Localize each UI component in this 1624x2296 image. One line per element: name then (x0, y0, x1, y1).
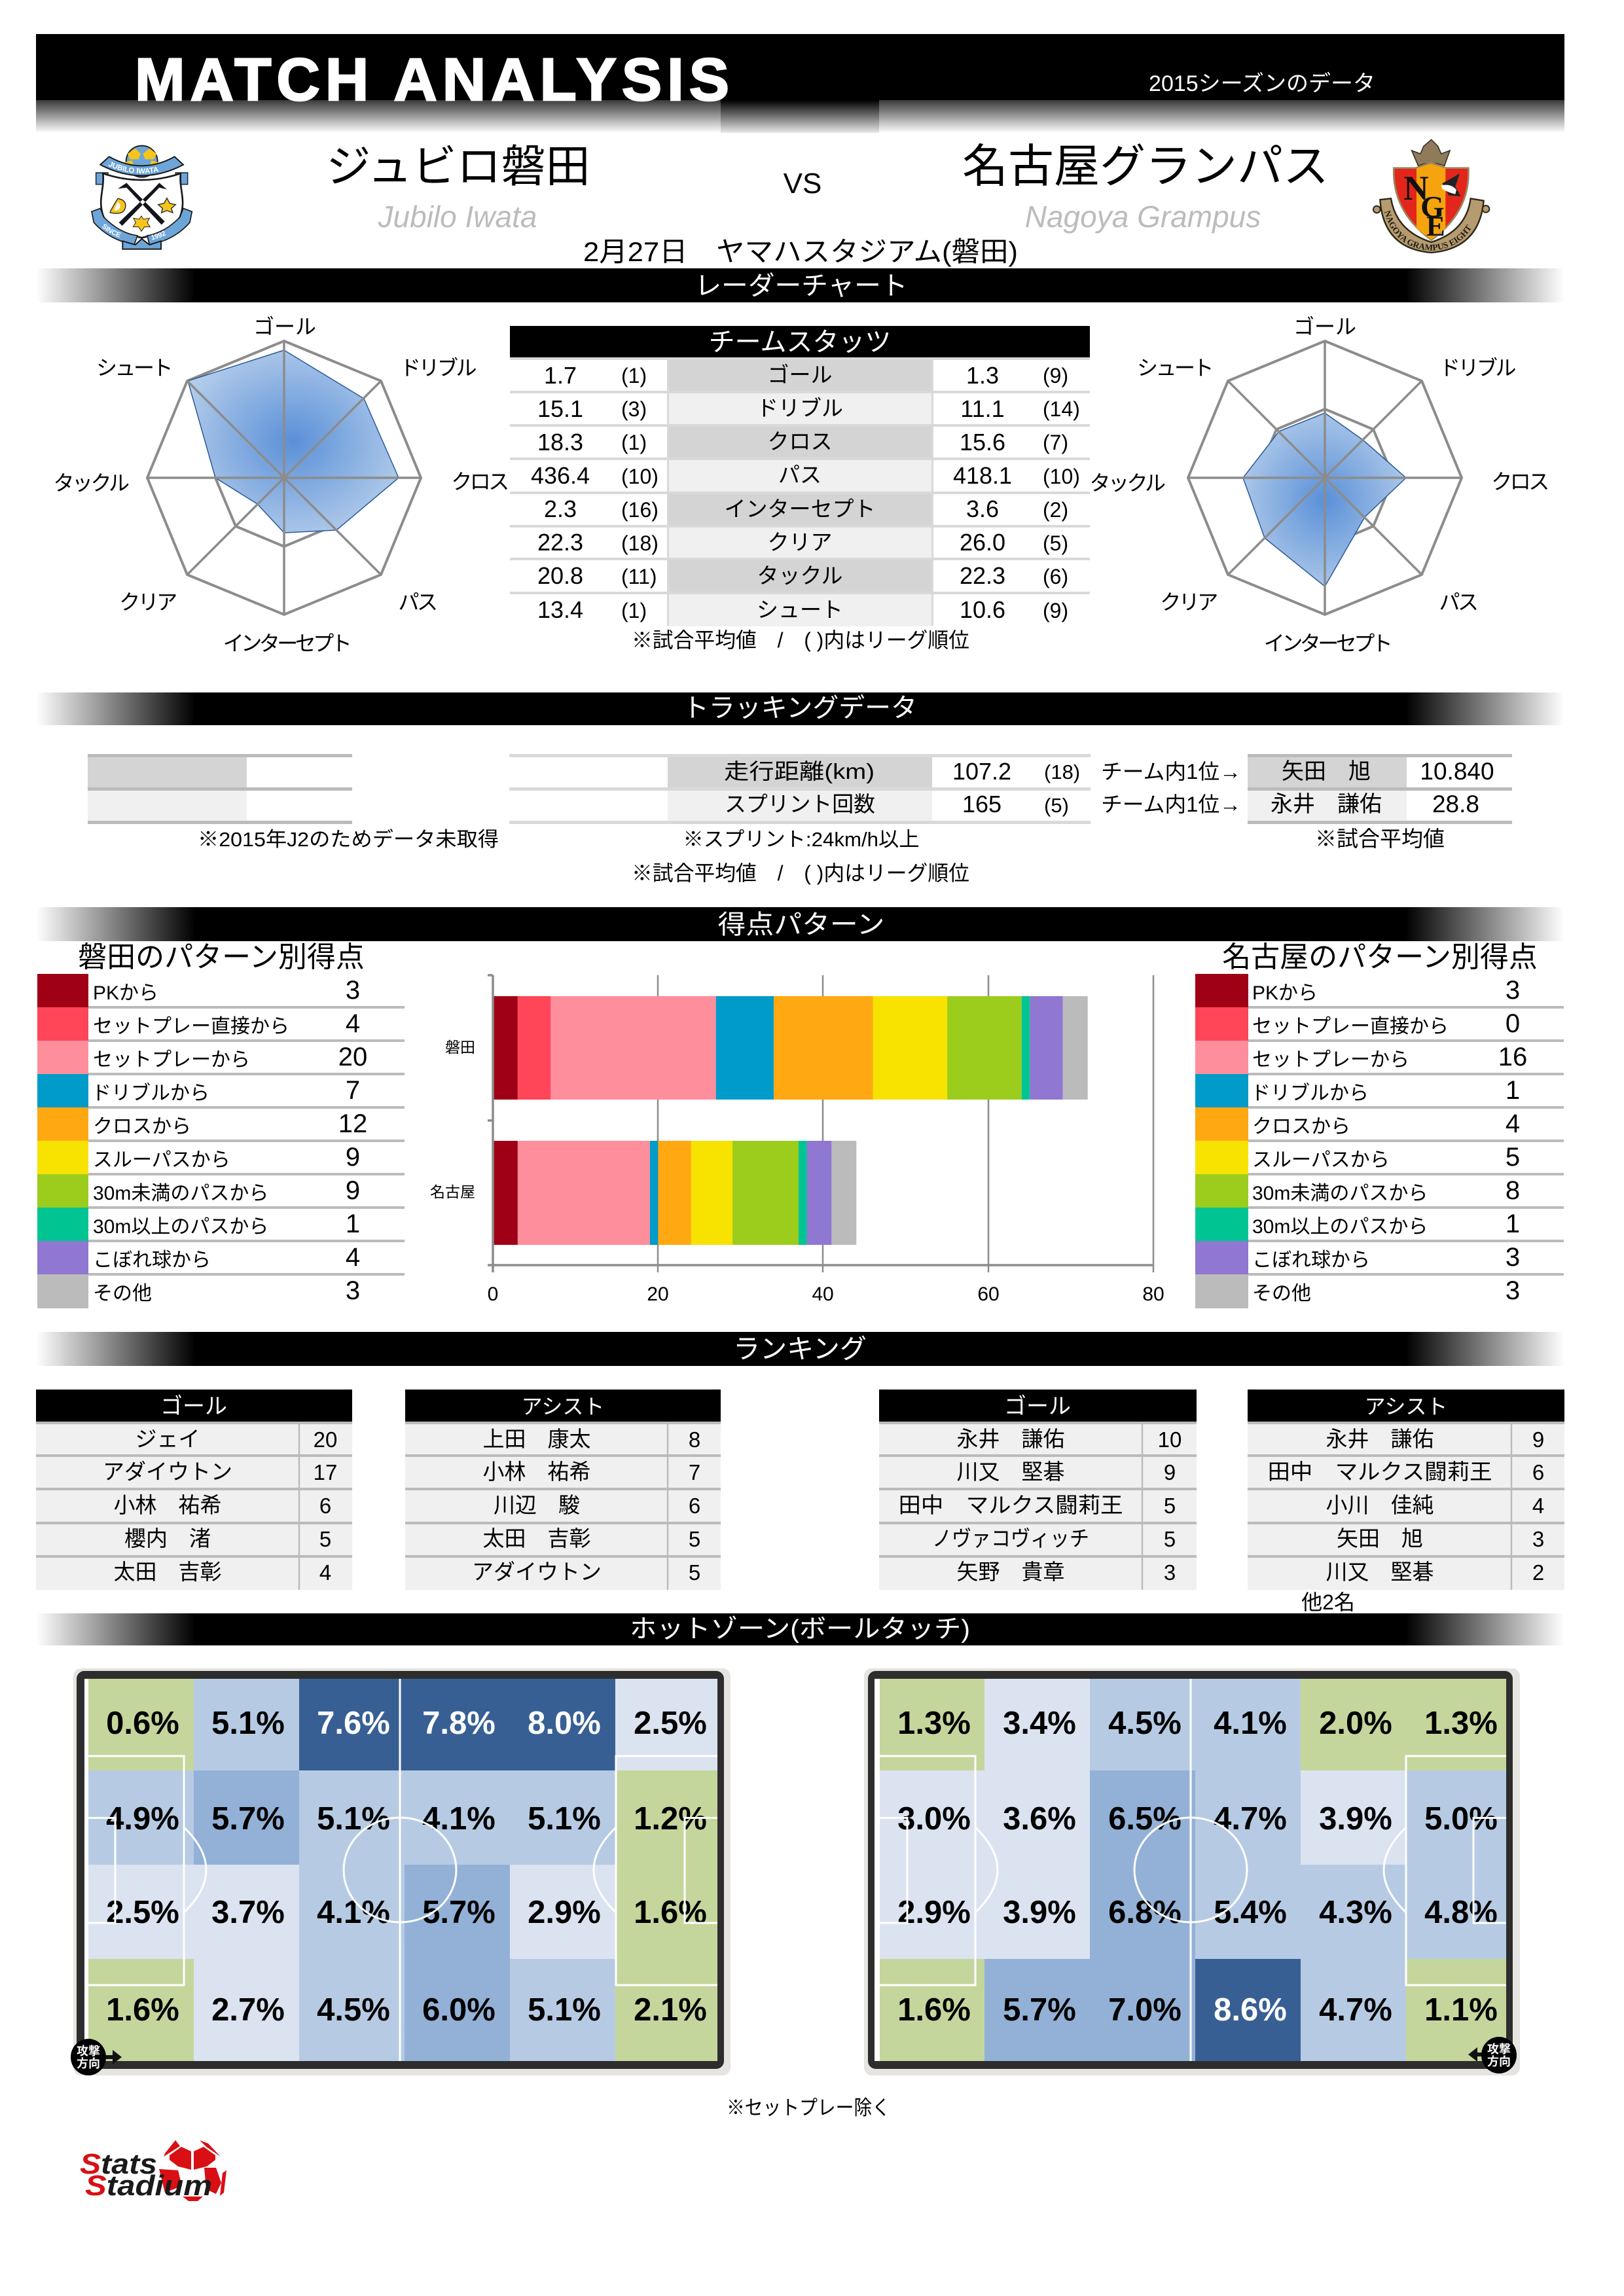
percentages: 2.5% (106, 1895, 179, 1930)
Jubilo ranks: (18) (621, 531, 659, 555)
Nagoya values: 22.3 (960, 562, 1005, 589)
legend labels: こぼれ球から (1252, 1249, 1370, 1271)
axis labels: 20 (647, 1283, 669, 1305)
legend labels: こぼれ球から (93, 1249, 211, 1271)
legend values: 3 (1506, 1276, 1520, 1305)
legend labels: その他 (93, 1283, 152, 1304)
percentages: 3.0% (897, 1801, 971, 1837)
Jubilo ranks: (11) (621, 565, 657, 588)
note: league rank: ※試合平均値 / ( )内はリーグ順位 (632, 861, 969, 885)
heading: Jubilo patterns: 磐田のパターン別得点 (78, 941, 365, 973)
ranking table: Jubilo assists: 8 (689, 1427, 700, 1452)
legend values: 12 (338, 1109, 367, 1138)
stat labels (724, 363, 876, 622)
Jubilo values: 22.3 (537, 529, 583, 556)
radar labels: クリア (1160, 590, 1217, 614)
ranking table: Jubilo goals: 4 (319, 1560, 331, 1585)
tracking labels: スプリント回数 (725, 792, 875, 816)
percentages: 2.7% (211, 1992, 285, 2028)
match date and venue: 2月27日 ヤマハスタジアム(磐田) (583, 236, 1018, 267)
callout: team best labels: チーム内1位→ (1101, 760, 1241, 783)
ranking table: Jubilo assists: アシスト (522, 1395, 604, 1418)
Jubilo ranks: (16) (621, 498, 659, 522)
Nagoya values: 11.1 (960, 395, 1005, 422)
percentages: 3.7% (211, 1895, 285, 1930)
legend labels: スルーパスから (93, 1149, 230, 1171)
ranking table: Jubilo assists (405, 1390, 721, 1590)
Nagoya values: 418.1 (953, 462, 1012, 489)
tracking ranks: (18) (1044, 761, 1080, 783)
legend labels: クロスから (93, 1116, 191, 1138)
ranking table: Nagoya goals: 永井 謙佑 (957, 1427, 1064, 1451)
ranking table: Nagoya goals: 矢野 貴章 (957, 1560, 1064, 1584)
tracking ranks: (5) (1044, 794, 1069, 817)
stat labels: ゴール (767, 363, 833, 387)
percentages: 4.5% (1108, 1706, 1182, 1741)
percentages: 7.0% (1108, 1992, 1182, 2028)
panel: team best players: 矢田 旭 (1282, 759, 1371, 784)
title: MATCH ANALYSIS (135, 46, 729, 113)
radar labels: ゴール (1293, 315, 1356, 338)
percentages: 4.1% (317, 1895, 390, 1930)
Jubilo ranks: (1) (621, 599, 647, 622)
ranking table: Jubilo goals: 6 (319, 1494, 331, 1518)
stat labels: タックル (757, 564, 843, 588)
ranking table: Nagoya assists: 川又 堅碁 (1326, 1560, 1434, 1584)
category labels: 名古屋 (430, 1183, 475, 1200)
percentages: 4.1% (422, 1801, 496, 1837)
Jubilo values: 2.3 (544, 495, 577, 522)
ranking table: Nagoya assists: 2 (1532, 1560, 1544, 1585)
percentages: 5.4% (1214, 1895, 1287, 1930)
ranking table: Jubilo goals: 17 (314, 1460, 337, 1484)
legend values: 1 (1506, 1210, 1520, 1238)
ranking table: Nagoya goals: 10 (1158, 1427, 1182, 1452)
ranking table: Nagoya assists (1248, 1390, 1564, 1590)
panel: team stats table: チームスタッツ (709, 328, 891, 357)
percentages: 5.1% (528, 1801, 601, 1837)
stat labels: クロス (767, 429, 833, 454)
callout: team best labels: チーム内1位→ (1101, 793, 1241, 816)
ranking table: Nagoya goals: 川又 堅碁 (957, 1460, 1064, 1484)
percentages: 2.0% (1319, 1706, 1392, 1741)
stat labels: シュート (757, 598, 843, 622)
section bar: ranking (36, 1332, 1564, 1366)
Jubilo values (531, 362, 590, 623)
stat labels: パス (778, 463, 821, 487)
percentages: 5.7% (211, 1801, 285, 1837)
vs label: VS (784, 168, 821, 200)
percentages: 8.0% (528, 1706, 601, 1741)
ranking table: Jubilo assists: アダイウトン (472, 1560, 602, 1584)
header banner (36, 34, 1564, 133)
percentages: 1.2% (634, 1801, 707, 1837)
icon: attack direction: 攻撃 (77, 2044, 100, 2058)
percentages: 4.9% (106, 1801, 179, 1837)
icon: Jubilo Iwata crest: SINCE (102, 224, 121, 238)
ranking table: Jubilo assists: 7 (689, 1460, 700, 1484)
axis labels: 80 (1142, 1283, 1164, 1305)
percentages: 3.4% (1003, 1706, 1076, 1741)
section bar: hot zone (36, 1613, 1564, 1645)
panel: team best players: 10.840 (1420, 758, 1494, 785)
note: no data: ※2015年J2のためデータ未取得 (198, 828, 499, 851)
panel: tracking Jubilo (no data) (88, 754, 352, 824)
ranking table: Jubilo goals (36, 1390, 352, 1590)
ranking table: Nagoya assists: 小川 佳純 (1326, 1493, 1434, 1517)
percentages: 2.1% (634, 1992, 707, 2028)
percentages: 4.1% (1214, 1706, 1287, 1741)
panel: team best players (1248, 754, 1512, 824)
ranking table: Nagoya goals: 田中 マルクス闘莉王 (898, 1493, 1123, 1517)
category labels: 磐田 (445, 1039, 475, 1056)
percentages: 6.8% (1108, 1895, 1182, 1930)
team name: Nagoya: 名古屋グランパス (962, 141, 1329, 192)
ranking table: Jubilo assists: 6 (689, 1494, 700, 1518)
percentages: 1.3% (897, 1706, 971, 1741)
radar labels: ドリブル (1439, 356, 1515, 380)
ranking table: Nagoya goals: ゴール (1004, 1394, 1071, 1419)
legend labels: セットプレーから (1252, 1049, 1409, 1071)
ranking table: Jubilo assists: 5 (689, 1527, 700, 1551)
legend values: 4 (346, 1009, 360, 1038)
percentages: 6.5% (1108, 1801, 1182, 1837)
percentages (897, 1706, 1498, 2028)
pitch lines (88, 1679, 717, 2061)
ranking table: Nagoya assists: 3 (1532, 1527, 1544, 1551)
percentages: 1.6% (897, 1992, 971, 2028)
icon: Stats Stadium logo: Stadium (85, 2170, 212, 2202)
tracking labels (724, 759, 875, 816)
legend labels: 30m以上のパスから (93, 1216, 268, 1238)
legend labels: スルーパスから (1252, 1149, 1390, 1171)
legend values: 4 (1506, 1109, 1520, 1138)
ranking table: Jubilo goals: 小林 祐希 (114, 1493, 221, 1517)
ranking table: Jubilo goals: アダイウトン (103, 1460, 232, 1484)
section bar: ranking: ランキング (733, 1334, 867, 1364)
panel: tracking Nagoya (509, 754, 1091, 824)
axis labels (488, 1283, 1164, 1305)
ranking table: Nagoya goals: 9 (1164, 1460, 1176, 1484)
percentages (106, 1706, 707, 2028)
Nagoya ranks: (9) (1043, 364, 1068, 387)
legend labels: ドリブルから (92, 1083, 209, 1104)
icon: attack direction: 方向 (77, 2056, 100, 2070)
legend values: 4 (346, 1243, 360, 1272)
english name: Nagoya: Nagoya Grampus (1025, 200, 1261, 234)
legend table: Nagoya (1195, 974, 1564, 1308)
radar labels: ドリブル (400, 356, 476, 380)
english name: Jubilo: Jubilo Iwata (378, 200, 537, 234)
icon: Stats Stadium logo: Stats (80, 2148, 157, 2180)
legend labels: その他 (1252, 1283, 1311, 1304)
Nagoya ranks: (14) (1043, 397, 1080, 421)
legend labels: 30m以上のパスから (1252, 1216, 1428, 1238)
legend labels: セットプレー直接から (1252, 1016, 1449, 1037)
legend labels (1251, 982, 1449, 1304)
radar labels: シュート (96, 356, 171, 380)
ranking table: Nagoya assists: 永井 謙佑 (1326, 1427, 1434, 1451)
section bar: tracking data (36, 692, 1564, 725)
ranking table: Jubilo assists: 太田 吉彰 (483, 1526, 590, 1551)
radar labels: インターセプト (1264, 632, 1390, 655)
note: set plays excluded: ※セットプレー除く (727, 2096, 890, 2119)
Jubilo values: 13.4 (537, 596, 583, 623)
hot zone pitch: Nagoya (864, 1668, 1520, 2075)
heat cells (88, 1679, 717, 2061)
percentages: 6.0% (422, 1992, 496, 2028)
Nagoya values (953, 362, 1012, 623)
legend values: 3 (1506, 1243, 1520, 1272)
ranking table: Jubilo assists: 小林 祐希 (483, 1460, 590, 1484)
percentages: 2.5% (634, 1706, 707, 1741)
axis labels: 60 (977, 1283, 1000, 1305)
Jubilo values: 436.4 (531, 462, 590, 489)
percentages: 1.1% (1424, 1992, 1498, 2028)
ranking table: Jubilo assists: 5 (689, 1560, 700, 1585)
ranking table: Nagoya assists: 9 (1532, 1427, 1544, 1452)
callout: team best labels (1101, 760, 1241, 816)
heat cells (880, 1679, 1506, 2061)
section bar: tracking data: トラッキングデータ (683, 694, 917, 723)
percentages: 5.7% (1003, 1992, 1076, 2028)
icon: Nagoya Grampus crest: N (1403, 168, 1429, 207)
percentages: 5.7% (422, 1895, 496, 1930)
icon: Jubilo Iwata crest (91, 145, 192, 250)
radar labels: パス (1439, 590, 1477, 614)
legend values: 1 (1506, 1076, 1520, 1105)
icon: attack direction (1468, 2037, 1517, 2073)
ranking table: Nagoya assists: アシスト (1365, 1395, 1447, 1418)
Nagoya values: 15.6 (960, 429, 1005, 456)
percentages: 5.1% (317, 1801, 390, 1837)
stat labels: クリア (767, 530, 833, 554)
axis labels: 40 (812, 1283, 834, 1305)
radar labels: クロス (451, 470, 507, 493)
icon: attack direction: 方向 (1487, 2054, 1511, 2068)
ranking table: Nagoya assists: 矢田 旭 (1337, 1526, 1423, 1551)
stacked bar chart (430, 975, 1164, 1305)
Nagoya values: 1.3 (966, 362, 999, 389)
section bar: radar chart: レーダーチャート (695, 272, 907, 300)
pitch lines (880, 1679, 1506, 2061)
Nagoya values: 3.6 (966, 495, 999, 522)
legend values: 5 (1506, 1143, 1520, 1172)
Nagoya ranks: (7) (1043, 431, 1068, 454)
ranking table: Nagoya goals (879, 1390, 1197, 1590)
legend labels: 30m未満のパスから (1252, 1183, 1428, 1204)
percentages: 4.7% (1214, 1801, 1287, 1837)
legend values: 20 (338, 1043, 367, 1071)
ranking table: Nagoya assists: 6 (1532, 1460, 1544, 1484)
Jubilo ranks: (10) (621, 465, 659, 488)
radar labels (53, 315, 507, 655)
percentages: 7.8% (422, 1706, 496, 1741)
ranking table: Jubilo goals: 太田 吉彰 (114, 1560, 221, 1584)
legend values: 3 (346, 976, 360, 1005)
legend labels: PKから (1252, 982, 1318, 1004)
section bar: scoring patterns (36, 907, 1564, 941)
Nagoya ranks: (10) (1043, 465, 1080, 488)
Nagoya ranks: (2) (1043, 498, 1068, 522)
tracking ranks (1044, 761, 1080, 817)
percentages: 3.9% (1319, 1801, 1392, 1837)
legend values: 3 (346, 1276, 360, 1305)
note: two others: 他2名 (1301, 1590, 1355, 1614)
ranking table: Jubilo goals: ジェイ (135, 1427, 200, 1451)
Jubilo ranks (621, 364, 659, 622)
icon: Nagoya Grampus crest (1373, 139, 1490, 254)
panel: team best players: 28.8 (1432, 791, 1479, 817)
percentages: 4.7% (1319, 1992, 1392, 2028)
percentages: 5.1% (211, 1706, 285, 1741)
radar chart: Jubilo (53, 315, 507, 655)
legend values: 9 (346, 1176, 360, 1205)
heading: Nagoya patterns: 名古屋のパターン別得点 (1222, 941, 1538, 973)
legend values: 16 (1498, 1043, 1527, 1071)
ranking table: Nagoya assists: 4 (1532, 1494, 1544, 1518)
icon: Nagoya Grampus crest: E (1426, 211, 1445, 242)
percentages: 5.1% (528, 1992, 601, 2028)
icon: Nagoya Grampus crest: G (1420, 190, 1444, 224)
ranking table: Nagoya goals: 5 (1164, 1494, 1176, 1518)
legend labels: セットプレー直接から (93, 1016, 289, 1037)
Nagoya ranks (1043, 364, 1080, 622)
team name: Jubilo: ジュビロ磐田 (326, 142, 590, 192)
percentages: 1.3% (1424, 1706, 1498, 1741)
category labels (430, 1039, 475, 1200)
percentages: 1.6% (106, 1992, 179, 2028)
note: stats: ※試合平均値 / ( )内はリーグ順位 (632, 628, 969, 652)
Jubilo values: 15.1 (537, 395, 583, 422)
ranking table: Jubilo goals: ゴール (160, 1394, 227, 1419)
icon: Nagoya Grampus crest: NAGOYA GRAMPUS EIGHT (1384, 210, 1471, 251)
percentages: 2.9% (897, 1895, 971, 1930)
panel: team stats table (510, 326, 1090, 626)
Jubilo values: 20.8 (537, 562, 583, 589)
hot zone pitch: Jubilo (71, 1668, 731, 2075)
percentages: 4.3% (1319, 1895, 1392, 1930)
section bar: scoring patterns: 得点パターン (717, 910, 885, 939)
Nagoya ranks: (9) (1043, 599, 1068, 622)
percentages: 0.6% (106, 1706, 179, 1741)
percentages: 8.6% (1214, 1992, 1287, 2028)
percentages: 5.0% (1424, 1801, 1498, 1837)
Nagoya values: 10.6 (960, 596, 1005, 623)
stat labels: インターセプト (724, 497, 876, 521)
legend labels: PKから (93, 982, 158, 1004)
percentages: 7.6% (317, 1706, 390, 1741)
icon: Jubilo Iwata crest: 1992 (151, 230, 166, 240)
icon: attack direction: 攻撃 (1487, 2042, 1511, 2056)
legend table: Jubilo (37, 974, 405, 1308)
legend values: 9 (346, 1143, 360, 1172)
icon: Stats Stadium logo (80, 2140, 226, 2202)
radar chart: Nagoya (1089, 315, 1547, 655)
radar labels (1089, 315, 1547, 655)
legend values: 8 (1506, 1176, 1520, 1205)
ranking table: Nagoya goals: ノヴァコヴィッチ (932, 1526, 1089, 1551)
legend values (338, 976, 367, 1305)
legend values: 3 (1506, 976, 1520, 1005)
tracking values: 165 (962, 791, 1001, 817)
ranking table: Nagoya goals: 3 (1164, 1560, 1176, 1585)
legend values: 1 (346, 1210, 360, 1238)
section bar: radar chart (36, 268, 1564, 302)
radar labels: ゴール (253, 315, 316, 338)
icon: Jubilo Iwata crest: JUBILO IWATA (109, 162, 158, 173)
ranking table: Jubilo goals: 20 (314, 1427, 337, 1452)
icon: attack direction (71, 2039, 122, 2075)
Jubilo values: 1.7 (544, 362, 577, 389)
percentages: 4.5% (317, 1992, 390, 2028)
legend labels: ドリブルから (1251, 1083, 1369, 1104)
radar labels: シュート (1137, 356, 1212, 380)
panel: team best players: 永井 謙佑 (1271, 792, 1382, 817)
legend labels: クロスから (1252, 1116, 1350, 1138)
radar labels: インターセプト (223, 632, 350, 655)
ranking table: Nagoya goals: 5 (1164, 1527, 1176, 1551)
Nagoya ranks: (5) (1043, 531, 1068, 555)
legend labels (92, 982, 289, 1304)
percentages: 1.6% (634, 1895, 707, 1930)
section bar: hot zone: ホットゾーン(ボールタッチ) (630, 1615, 970, 1643)
Jubilo values: 18.3 (537, 429, 583, 456)
ranking table: Nagoya assists: 田中 マルクス闘莉王 (1267, 1460, 1492, 1484)
note: sprint: ※スプリント:24km/h以上 (683, 828, 919, 851)
legend values: 0 (1506, 1009, 1520, 1038)
ranking table: Jubilo assists: 上田 康太 (483, 1427, 590, 1451)
percentages: 2.9% (528, 1895, 601, 1930)
radar labels: パス (398, 590, 436, 614)
Jubilo ranks: (1) (621, 364, 647, 387)
ranking table: Jubilo assists: 川辺 駿 (494, 1493, 580, 1517)
Nagoya ranks: (6) (1043, 565, 1068, 588)
note: match average: ※試合平均値 (1315, 827, 1445, 851)
ranking table: Jubilo goals: 5 (319, 1527, 331, 1551)
tracking labels: 走行距離(km) (724, 759, 875, 783)
legend values (1498, 976, 1527, 1305)
Jubilo ranks: (3) (621, 397, 647, 421)
bar: Nagoya (493, 1141, 856, 1245)
radar labels: クロス (1491, 470, 1547, 493)
radar labels: タックル (1089, 471, 1165, 495)
radar labels: タックル (53, 471, 129, 495)
percentages: 3.9% (1003, 1895, 1076, 1930)
radar labels: クリア (119, 590, 176, 614)
tracking values (952, 758, 1011, 817)
bar: Jubilo (493, 996, 1088, 1100)
legend values: 7 (346, 1076, 360, 1105)
percentages: 3.6% (1003, 1801, 1076, 1837)
stat labels: ドリブル (757, 396, 843, 420)
legend labels: セットプレーから (93, 1049, 250, 1071)
Nagoya values: 26.0 (960, 529, 1005, 556)
season note: 2015シーズンのデータ (1149, 71, 1375, 96)
axis labels: 0 (488, 1283, 498, 1305)
ranking table: Jubilo goals: 櫻内 渚 (124, 1526, 211, 1551)
legend labels: 30m未満のパスから (93, 1183, 268, 1204)
tracking values: 107.2 (952, 758, 1011, 785)
percentages: 4.8% (1424, 1895, 1498, 1930)
Jubilo ranks: (1) (621, 431, 647, 454)
